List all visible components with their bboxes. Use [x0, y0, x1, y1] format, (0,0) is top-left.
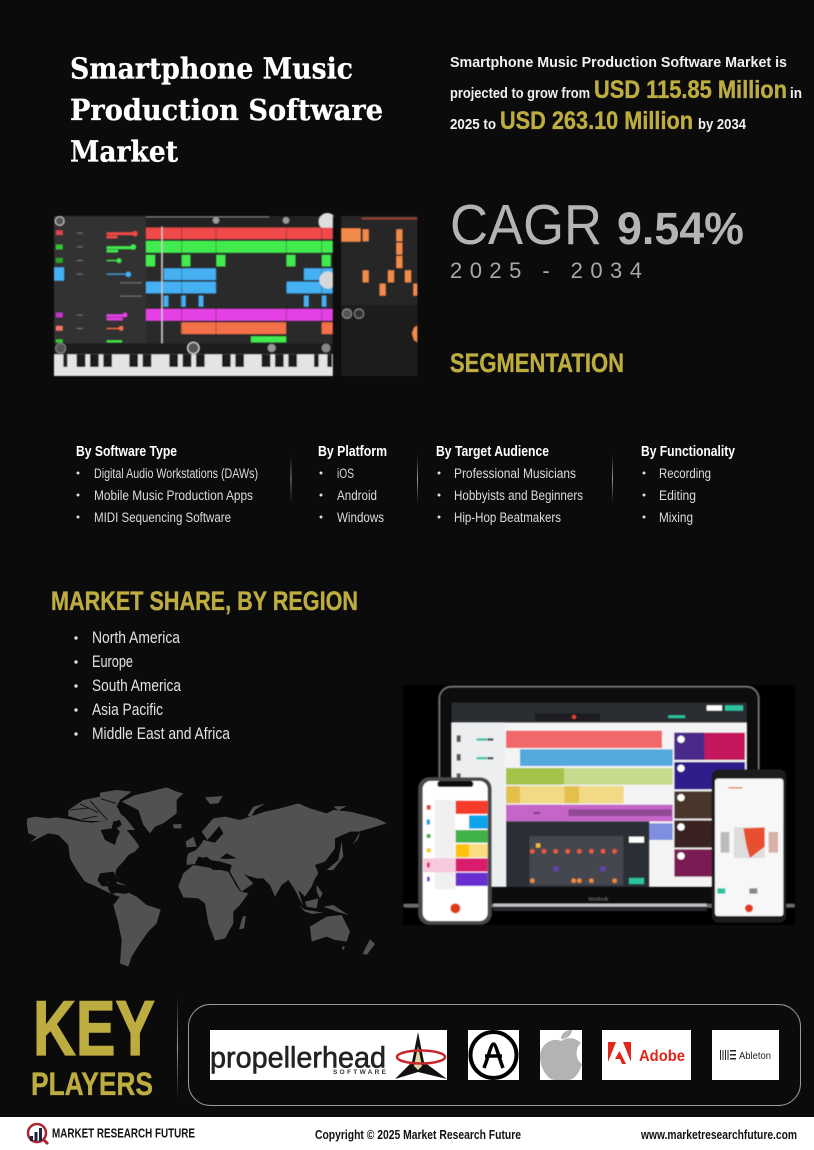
key players heading — [31, 984, 155, 1102]
market size statement: USD 263.10 Million — [500, 107, 693, 135]
column: by platform: By Platform — [318, 443, 387, 460]
title: Smartphone Music — [70, 52, 353, 86]
CAGR figure — [450, 193, 744, 283]
icon: market research future logo — [28, 1124, 48, 1144]
column: by target audience: Professional Musicians — [454, 466, 576, 481]
column: by functionality: By Functionality — [641, 443, 736, 460]
market size statement: by 2034 — [698, 116, 747, 133]
logo: propellerhead: SOFTWARE — [333, 1069, 387, 1076]
footer bar: Copyright © 2025 Market Research Future — [315, 1127, 521, 1142]
market size statement: USD 115.85 Million — [594, 76, 787, 104]
region list: South America — [92, 677, 182, 695]
title — [70, 52, 383, 168]
map: Europe, Africa, Asia and Oceania — [178, 796, 387, 955]
column: by software type: By Software Type — [76, 443, 177, 460]
column: by software type: Digital Audio Workstations (DAWs) — [94, 466, 258, 481]
market size statement: 2025 to — [450, 116, 496, 133]
segmentation heading: SEGMENTATION — [450, 348, 624, 378]
column: by target audience: Hobbyists and Beginners — [454, 488, 583, 503]
market size statement: in — [790, 85, 802, 102]
column: by software type: Mobile Music Production Apps — [94, 488, 253, 503]
market size statement: Smartphone Music Production Software Market is — [450, 54, 787, 71]
key players heading: KEY — [33, 984, 155, 1072]
column: by platform: Windows — [337, 510, 384, 525]
map: Americas and Greenland — [27, 787, 183, 967]
screenshot: mobile DAW — [54, 213, 417, 376]
logo: propellerhead — [210, 1030, 447, 1080]
column: by functionality: Mixing — [659, 510, 693, 525]
logo: propellerhead: propellerhead — [210, 1042, 386, 1074]
column: by target audience — [436, 443, 583, 525]
key players panel — [188, 1004, 800, 1106]
product image: laptop and phones — [403, 685, 795, 925]
column: by functionality — [641, 443, 736, 525]
column: by platform — [318, 443, 387, 525]
footer bar: MARKET RESEARCH FUTURE — [52, 1126, 195, 1140]
market size statement — [450, 54, 802, 135]
CAGR figure: CAGR — [450, 193, 602, 257]
product image: laptop and phones: MacBook — [589, 897, 609, 902]
column: by target audience: By Target Audience — [436, 443, 549, 460]
segmentation columns — [76, 443, 736, 525]
market share heading: MARKET SHARE, BY REGION — [51, 586, 358, 616]
CAGR figure: 9.54% — [617, 203, 744, 254]
logo: adobe: Adobe — [639, 1048, 685, 1065]
title: Market — [70, 134, 179, 168]
CAGR figure: 2025 - 2034 — [450, 258, 642, 283]
logo: ableton: Ableton — [739, 1051, 771, 1062]
column: by functionality: Recording — [659, 466, 711, 481]
column: by functionality: Editing — [659, 488, 696, 503]
region list: Asia Pacific — [92, 701, 163, 719]
column: by target audience: Hip-Hop Beatmakers — [454, 510, 561, 525]
title: Production Software — [70, 93, 383, 127]
region list: Middle East and Africa — [92, 725, 231, 743]
region list: Europe — [92, 653, 133, 671]
column: by software type: MIDI Sequencing Software — [94, 510, 231, 525]
footer bar — [0, 1117, 814, 1150]
region list: North America — [92, 629, 181, 647]
market size statement: projected to grow from — [450, 85, 590, 102]
logo: ableton — [712, 1030, 779, 1080]
logo: apple — [540, 1030, 582, 1080]
column: by platform: Android — [337, 488, 377, 503]
column: by software type — [76, 443, 258, 525]
world map — [27, 787, 387, 967]
region list — [74, 629, 231, 743]
logo: adobe — [602, 1030, 691, 1080]
column: by platform: iOS — [337, 466, 354, 481]
key players heading: PLAYERS — [31, 1066, 153, 1102]
logo: arturia — [468, 1030, 519, 1080]
